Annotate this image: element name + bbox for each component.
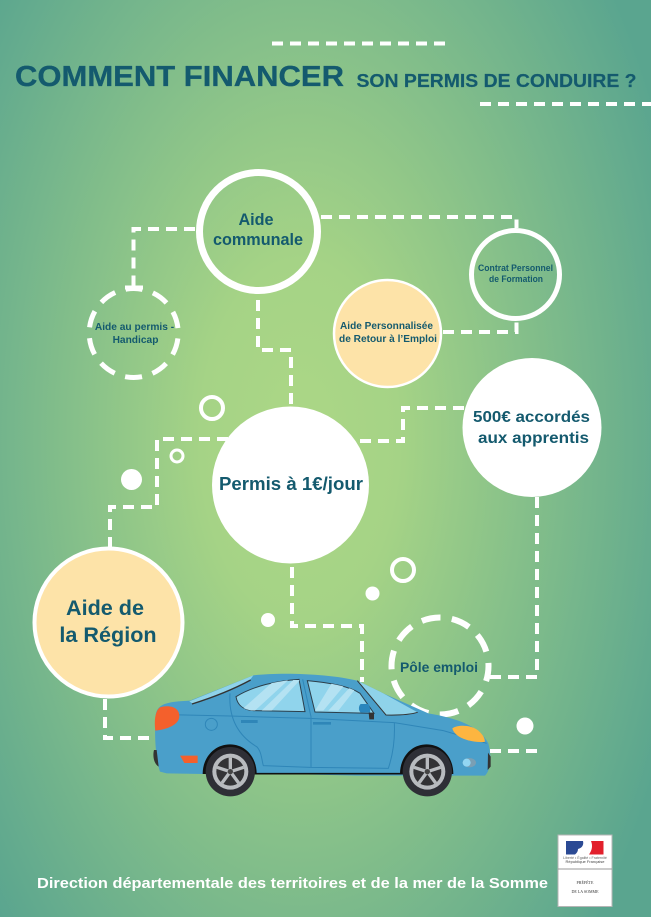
mirror (359, 704, 370, 713)
circle: Aide au permis - Handicap: Handicap (113, 335, 158, 346)
rear light (155, 706, 179, 731)
logo: préfète de la Somme: Liberté • Égalité • Fraternité (563, 855, 607, 860)
front wheel (400, 744, 453, 796)
circle: 500€ accordés aux apprentis (462, 358, 602, 497)
circle: Aide communale: communale (213, 231, 303, 249)
circle: Aide au permis - Handicap: Aide au permis - (95, 322, 174, 333)
door lines (157, 679, 487, 768)
circle: Aide Personnalisée de Retour à l'Emploi: de Retour à l’Emploi (339, 334, 437, 345)
decorative bubbles (121, 397, 534, 734)
side windows (236, 679, 305, 712)
logo: préfète de la Somme: République Française (566, 859, 605, 864)
circle: Pôle emploi: Pôle emploi (400, 660, 478, 675)
header dashes (272, 44, 651, 104)
circle: Aide de la Région: la Région (59, 622, 157, 647)
car body (155, 674, 490, 776)
icon: blue car (153, 674, 491, 796)
circle: Aide communale (200, 172, 318, 290)
logo: préfète de la Somme (558, 835, 612, 906)
circle: Aide au permis - Handicap (89, 288, 178, 378)
circle: Contrat Personnel de Formation (472, 230, 560, 318)
connector lines (105, 217, 540, 751)
footer text: Direction départementale des territoires et de la mer de la Somme (37, 876, 548, 892)
circle: Aide de la Région: Aide de (66, 595, 144, 620)
circle: 500€ accordés aux apprentis: aux apprentis (478, 430, 589, 447)
bumpers (153, 750, 491, 770)
circle: Contrat Personnel de Formation: de Formation (489, 274, 543, 285)
underbody (250, 771, 407, 776)
circle: Pôle emploi (392, 618, 488, 714)
circle: Aide Personnalisée de Retour à l'Emploi: Aide Personnalisée (340, 321, 434, 332)
logo: préfète de la Somme: PRÉFÈTE (577, 880, 594, 885)
circle: 500€ accordés aux apprentis: 500€ accordés (473, 409, 590, 426)
rear wheel (203, 744, 257, 796)
flag (566, 841, 604, 854)
title: COMMENT FINANCER (15, 61, 344, 93)
circle: Aide communale: Aide (238, 211, 274, 229)
logo: préfète de la Somme: DE LA SOMME (571, 889, 599, 894)
windscreen and rear screen (189, 675, 253, 704)
circle: Aide Personnalisée de Retour à l'Emploi (334, 280, 441, 387)
window reflections (241, 680, 300, 711)
circle: Contrat Personnel de Formation: Contrat Personnel (478, 263, 553, 274)
circle: Permis à 1€/jour: Permis à 1€/jour (219, 473, 363, 494)
circle: Permis à 1€/jour (212, 406, 369, 564)
title (15, 61, 636, 93)
title: SON PERMIS DE CONDUIRE ? (356, 71, 636, 91)
headlight (452, 726, 485, 742)
circle: Aide de la Région (34, 548, 182, 696)
